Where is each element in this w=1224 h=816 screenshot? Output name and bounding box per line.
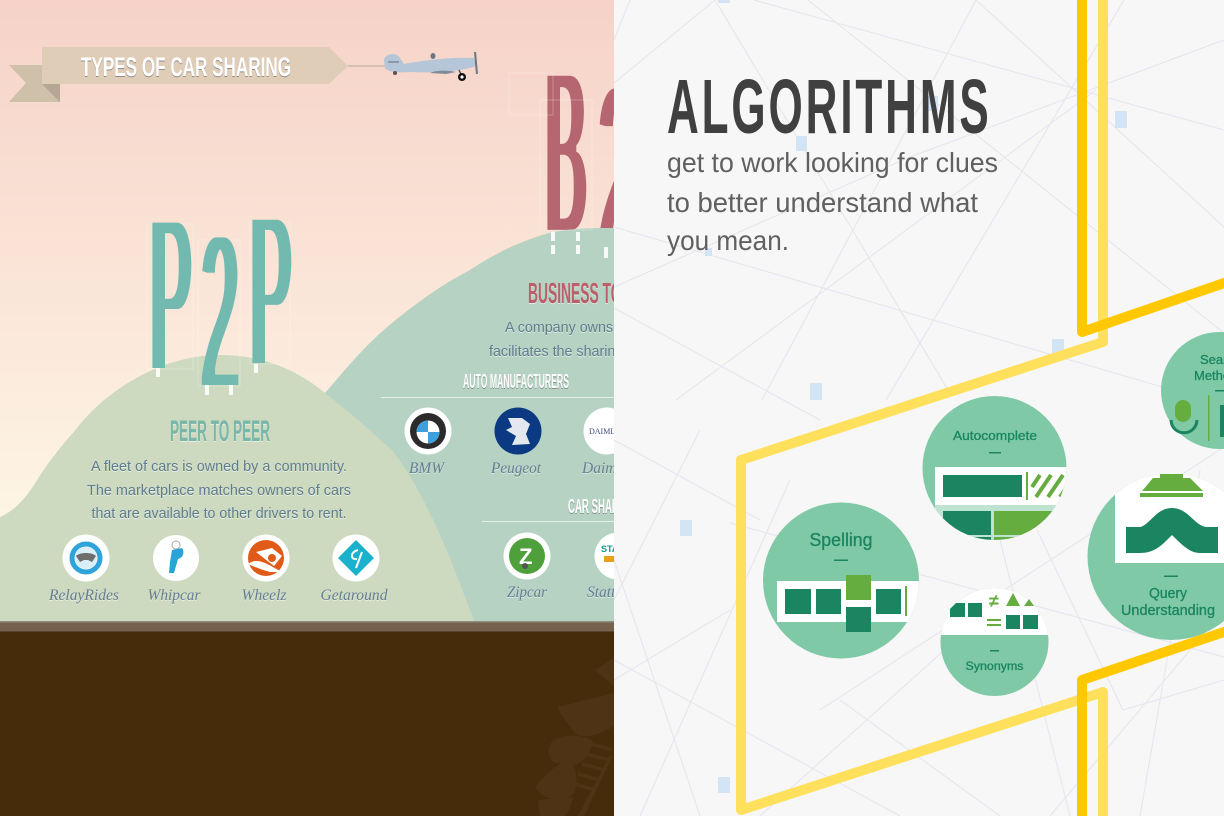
paper background bbox=[614, 0, 1224, 816]
hill: business to business bbox=[300, 228, 614, 621]
icon: Zipcar bbox=[504, 532, 550, 580]
panel: types of car sharing: 2 bbox=[599, 38, 639, 298]
labels: auto manufacturers: BMW bbox=[409, 460, 446, 477]
labels: auto manufacturers: Peugeot bbox=[490, 460, 542, 477]
panel: types of car sharing: CAR SHARING bbox=[568, 496, 636, 518]
icon: Whipcar bbox=[153, 535, 199, 581]
dark yellow path lower bbox=[1082, 630, 1224, 816]
icon: BMW bbox=[404, 408, 452, 454]
circle: autocomplete: Autocomplete bbox=[953, 428, 1037, 443]
soil bbox=[0, 632, 614, 816]
hill: peer to peer bbox=[0, 355, 474, 621]
circle: query understanding: Understanding bbox=[1121, 603, 1215, 619]
circle: query understanding: Query bbox=[1149, 586, 1188, 602]
document icons bbox=[680, 0, 1127, 793]
icon: Zipcar: Z bbox=[519, 544, 532, 569]
P2P letters bbox=[152, 220, 292, 385]
text block: peer to peer description bbox=[87, 459, 351, 522]
text block: algorithms description: get to work looking for clues bbox=[667, 147, 998, 178]
icon: Getaround bbox=[332, 534, 380, 582]
title: ALGORITHMS bbox=[667, 64, 992, 150]
dark yellow path upper bbox=[1082, 0, 1224, 332]
panel: types of car sharing: PEER TO PEER bbox=[170, 415, 270, 448]
B2B letter legs bbox=[551, 232, 608, 258]
network lines bbox=[614, 0, 1224, 816]
B2B letters bbox=[547, 76, 614, 230]
icon: airplane bbox=[384, 52, 478, 81]
labels: car sharing services bbox=[507, 586, 614, 602]
text block: peer to peer description: A fleet of cars is owned by a community. bbox=[91, 459, 347, 475]
divider bbox=[482, 521, 614, 522]
circle: synonyms: Synonyms bbox=[966, 661, 1024, 673]
P2P letter legs bbox=[156, 364, 258, 395]
text block: algorithms description bbox=[667, 147, 998, 256]
B2B letters: B bbox=[546, 23, 586, 283]
panel: algorithms bbox=[614, 0, 1224, 816]
P2P letters: 2 bbox=[202, 189, 238, 435]
icon: Stattauto: STA bbox=[601, 544, 619, 554]
labels: peer to peer services: Wheelz bbox=[242, 587, 286, 604]
icon: Daimler: DAIMLER bbox=[589, 427, 626, 436]
circle: synonyms bbox=[940, 585, 1050, 696]
panel: types of car sharing: AUTO MANUFACTURERS bbox=[463, 371, 569, 393]
labels: peer to peer services bbox=[48, 587, 388, 604]
fossil silhouette bbox=[535, 658, 614, 816]
labels: auto manufacturers bbox=[409, 462, 614, 478]
labels: peer to peer services: Whipcar bbox=[148, 587, 201, 604]
icon: Daimler bbox=[584, 408, 614, 454]
banner tail bbox=[9, 65, 60, 102]
ground strip bbox=[0, 621, 614, 632]
banner title: TYPES OF CAR SHARING bbox=[81, 52, 291, 82]
labels: peer to peer services: RelayRides bbox=[48, 587, 119, 604]
text block: business to business description: facilitates the sharing bbox=[489, 344, 623, 360]
tow rope bbox=[348, 65, 387, 67]
divider bbox=[381, 397, 614, 398]
text block: algorithms description: to better understand what bbox=[667, 187, 978, 218]
labels: peer to peer services: Getaround bbox=[320, 587, 388, 604]
circle: synonyms: ≠ bbox=[989, 591, 999, 611]
circle: autocomplete bbox=[922, 396, 1072, 545]
labels: auto manufacturers: Daimler bbox=[581, 460, 635, 477]
text block: business to business description bbox=[489, 322, 614, 357]
labels: car sharing services: Stattauto bbox=[587, 584, 643, 601]
icon: Peugeot bbox=[494, 408, 542, 454]
circle: query understanding bbox=[1088, 470, 1224, 640]
text block: algorithms description: you mean. bbox=[667, 225, 789, 256]
P2P letters: P bbox=[151, 172, 191, 418]
panel: types of car sharing bbox=[0, 0, 614, 816]
panel: types of car sharing: P bbox=[251, 170, 291, 412]
text block: peer to peer description: that are available to other drivers to rent. bbox=[92, 506, 346, 522]
icon: Wheelz bbox=[242, 534, 290, 582]
icon: RelayRides bbox=[62, 534, 110, 582]
light yellow path bbox=[741, 0, 1103, 816]
circle: spelling: Spelling bbox=[810, 530, 872, 550]
faint construction grid bbox=[147, 73, 592, 386]
text block: peer to peer description: The marketplace matches owners of cars bbox=[87, 483, 351, 499]
circle: spelling bbox=[763, 502, 922, 658]
labels: car sharing services: Zipcar bbox=[507, 584, 548, 601]
text: BUSINESS TO BUSINESS bbox=[528, 278, 696, 310]
banner bbox=[42, 47, 348, 84]
icon: Stattauto bbox=[594, 532, 614, 580]
circle: search methods bbox=[1161, 332, 1224, 449]
text block: business to business description: A company owns a fleet bbox=[505, 320, 656, 336]
sky background bbox=[0, 0, 614, 530]
